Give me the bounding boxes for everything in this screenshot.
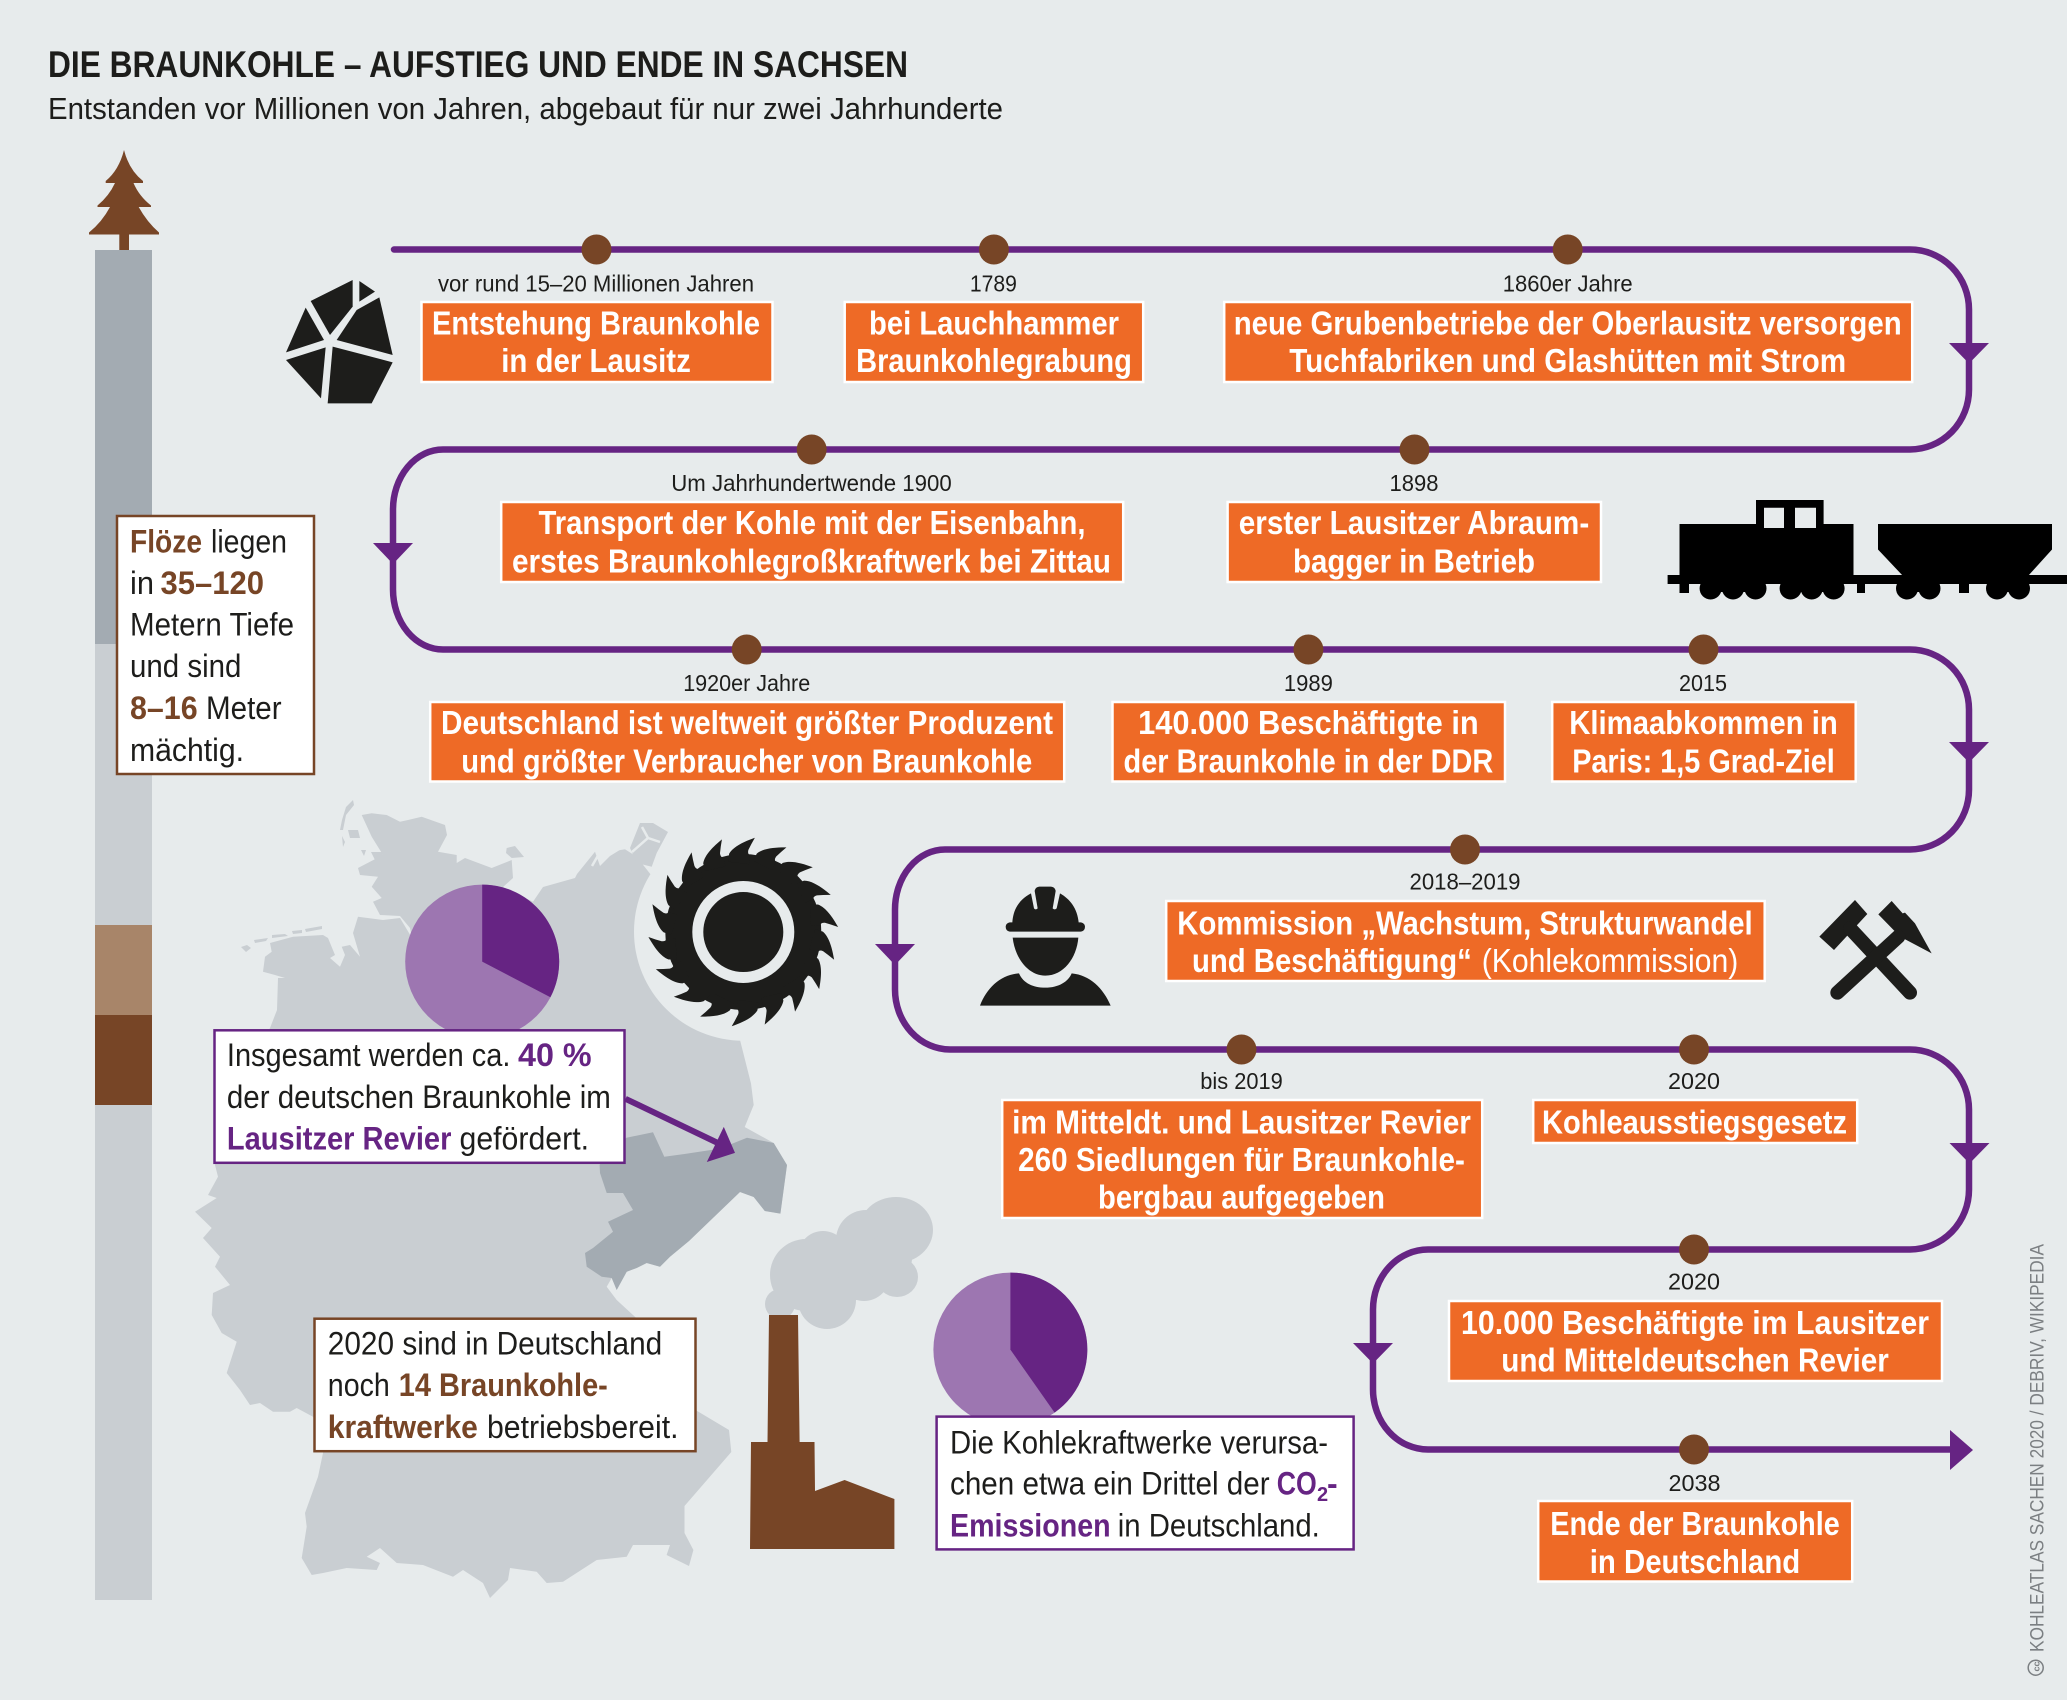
callout: CO2: chen etwa ein Drittel der xyxy=(950,1466,1270,1502)
event: bis 2019: im Mitteldt. und Lausitzer Revier xyxy=(1012,1103,1471,1140)
text: seam depth box: Metern Tiefe xyxy=(130,606,294,642)
event: Um Jahrhundertwende 1900: Um Jahrhundertwende 1900 xyxy=(671,470,952,496)
event: 2020 Beschäftigte: 2020 xyxy=(1668,1268,1720,1294)
subtitle: Entstanden vor Millionen von Jahren, abgebaut für nur zwei Jahrhunderte xyxy=(48,91,1003,126)
text: seam depth box: liegen xyxy=(211,524,287,560)
text: seam depth box: mächtig. xyxy=(130,732,244,768)
event: 2015: 2015 xyxy=(1679,670,1727,696)
event: 1920er Jahre: 1920er Jahre xyxy=(683,670,810,696)
text: seam depth box: und sind xyxy=(130,648,241,684)
event: 1920er Jahre: Deutschland ist weltweit größter Produzent xyxy=(441,704,1053,741)
event: Entstehung Braunkohle: Entstehung Braunkohle xyxy=(432,305,760,342)
title: DIE BRAUNKOHLE – AUFSTIEG UND ENDE IN SACHSEN xyxy=(48,44,908,85)
text: seam depth box: 35–120 xyxy=(160,565,264,601)
callout: CO2: CO xyxy=(1277,1466,1317,1502)
event: bis 2019: bis 2019 xyxy=(1200,1068,1283,1094)
event: 1860er Jahre: Tuchfabriken und Glashütten mit Strom xyxy=(1289,342,1846,379)
event: 1898: 1898 xyxy=(1390,470,1438,496)
callout: 40 percent: gefördert. xyxy=(460,1121,589,1157)
timeline dots xyxy=(582,234,1718,1464)
event: 1789: Braunkohlegrabung xyxy=(856,342,1132,379)
timeline path xyxy=(393,250,1969,1450)
event: 1860er Jahre: 1860er Jahre xyxy=(1503,270,1633,296)
callout: power plants: noch xyxy=(328,1367,390,1403)
icon: bucket wheel saw xyxy=(634,823,852,1041)
icon: smoke cloud xyxy=(765,1197,933,1329)
event: bis 2019 xyxy=(1002,1068,1482,1218)
text: seam depth box: Flöze xyxy=(130,524,202,560)
event: 1920er Jahre xyxy=(430,670,1064,782)
soil column xyxy=(95,250,152,1600)
callout: power plants: 2020 sind in Deutschland xyxy=(328,1326,662,1362)
event: 1989 xyxy=(1112,670,1505,782)
callout: CO2 xyxy=(937,1417,1354,1549)
event: 1989: 1989 xyxy=(1284,670,1333,696)
map: Germany xyxy=(195,800,787,1598)
text: seam depth box: in xyxy=(130,565,154,601)
event: bis 2019: 260 Siedlungen für Braunkohle- xyxy=(1018,1141,1465,1178)
icon: hammer and pick xyxy=(1819,900,1932,993)
arrowheads xyxy=(373,343,1990,1470)
event: 2020 Beschäftigte: und Mitteldeutschen Revier xyxy=(1501,1342,1889,1378)
event: bis 2019: bergbau aufgegeben xyxy=(1098,1178,1385,1216)
event: 2020 Kohleausstiegsgesetz: 2020 xyxy=(1668,1068,1720,1094)
callout: power plants xyxy=(314,1319,696,1451)
text: seam depth box xyxy=(117,516,314,774)
callout: CO2: Die Kohlekraftwerke verursa- xyxy=(950,1424,1328,1460)
event: Um Jahrhundertwende 1900 xyxy=(501,470,1123,582)
callout: 40 percent: Insgesamt werden ca. xyxy=(227,1037,510,1073)
event: 1789 xyxy=(845,270,1143,382)
credit line: KOHLEATLAS SACHEN 2020 / DEBRIV, WIKIPEDIA xyxy=(2028,1244,2048,1652)
icon: power plant xyxy=(750,1315,894,1549)
event: 2038: Ende der Braunkohle xyxy=(1550,1505,1840,1542)
event: 1898 xyxy=(1228,470,1601,582)
event: 1989: 140.000 Beschäftigte in xyxy=(1138,704,1479,741)
callout: power plants: 14 Braunkohle- xyxy=(399,1367,608,1403)
event: 2015 xyxy=(1552,670,1856,782)
callout: power plants: kraftwerke xyxy=(328,1409,478,1445)
event: 2020 Beschäftigte xyxy=(1449,1268,1942,1381)
event: 1898: erster Lausitzer Abraum- xyxy=(1239,504,1589,541)
event: Um Jahrhundertwende 1900: erstes Braunkohlegroßkraftwerk bei Zittau xyxy=(512,542,1111,580)
event: 2018–2019: (Kohlekommission) xyxy=(1482,942,1738,979)
event: Entstehung Braunkohle: vor rund 15–20 Millionen Jahren xyxy=(438,270,754,296)
event: 1898: bagger in Betrieb xyxy=(1293,542,1535,580)
event: 2018–2019: Kommission „Wachstum, Strukturwandel xyxy=(1177,904,1753,942)
event: 2018–2019: 2018–2019 xyxy=(1410,869,1520,895)
callout: CO2: 2 xyxy=(1317,1484,1328,1506)
event: 2038: 2038 xyxy=(1668,1470,1720,1496)
arrow: to Lusatia xyxy=(626,1099,735,1162)
event: Um Jahrhundertwende 1900: Transport der Kohle mit der Eisenbahn, xyxy=(538,504,1086,541)
event: 1860er Jahre xyxy=(1224,270,1912,382)
icon: miner xyxy=(980,887,1111,1006)
map: Saxony highlighted xyxy=(585,1132,787,1290)
pie chart: CO2 share xyxy=(933,1273,1087,1427)
icon: coal lump xyxy=(286,280,393,403)
event: Entstehung Braunkohle: in der Lausitz xyxy=(501,342,691,379)
callout: CO2: in Deutschland. xyxy=(1118,1508,1320,1544)
text: seam depth box: 8–16 xyxy=(130,690,198,726)
callout: CO2: - xyxy=(1327,1466,1338,1502)
event: 1789: bei Lauchhammer xyxy=(869,305,1119,342)
event: Entstehung Braunkohle xyxy=(422,270,772,382)
callout: 40 percent: Lausitzer Revier xyxy=(227,1121,451,1157)
callout: 40 percent: der deutschen Braunkohle im xyxy=(227,1079,611,1115)
event: 1860er Jahre: neue Grubenbetriebe der Oberlausitz versorgen xyxy=(1234,305,1902,342)
callout: 40 percent: 40 % xyxy=(518,1037,592,1073)
icon: tree xyxy=(89,150,159,250)
callout: power plants: betriebsbereit. xyxy=(487,1409,678,1445)
event: 2020 Kohleausstiegsgesetz: Kohleausstiegsgesetz xyxy=(1542,1103,1847,1140)
credit line: cc xyxy=(2032,1661,2042,1672)
event: 2018–2019 xyxy=(1166,869,1765,981)
event: 2015: Paris: 1,5 Grad-Ziel xyxy=(1572,742,1835,780)
text: seam depth box: Meter xyxy=(206,690,282,726)
event: 2038 xyxy=(1538,1470,1852,1582)
pie chart: 40 percent Lusatia xyxy=(405,885,559,1039)
event: 2015: Klimaabkommen in xyxy=(1569,704,1838,741)
icon: train xyxy=(1668,500,2067,600)
event: 1920er Jahre: und größter Verbraucher von Braunkohle xyxy=(461,742,1032,780)
event: 2038: in Deutschland xyxy=(1590,1543,1800,1580)
event: 1989: der Braunkohle in der DDR xyxy=(1124,742,1493,780)
event: 1789: 1789 xyxy=(970,270,1017,296)
event: 2020 Kohleausstiegsgesetz xyxy=(1533,1068,1857,1143)
event: 2018–2019: und Beschäftigung“ xyxy=(1192,942,1472,979)
event: 2020 Beschäftigte: 10.000 Beschäftigte im Lausitzer xyxy=(1461,1304,1929,1341)
callout: CO2: Emissionen xyxy=(950,1508,1111,1544)
callout: 40 percent xyxy=(214,1030,624,1163)
